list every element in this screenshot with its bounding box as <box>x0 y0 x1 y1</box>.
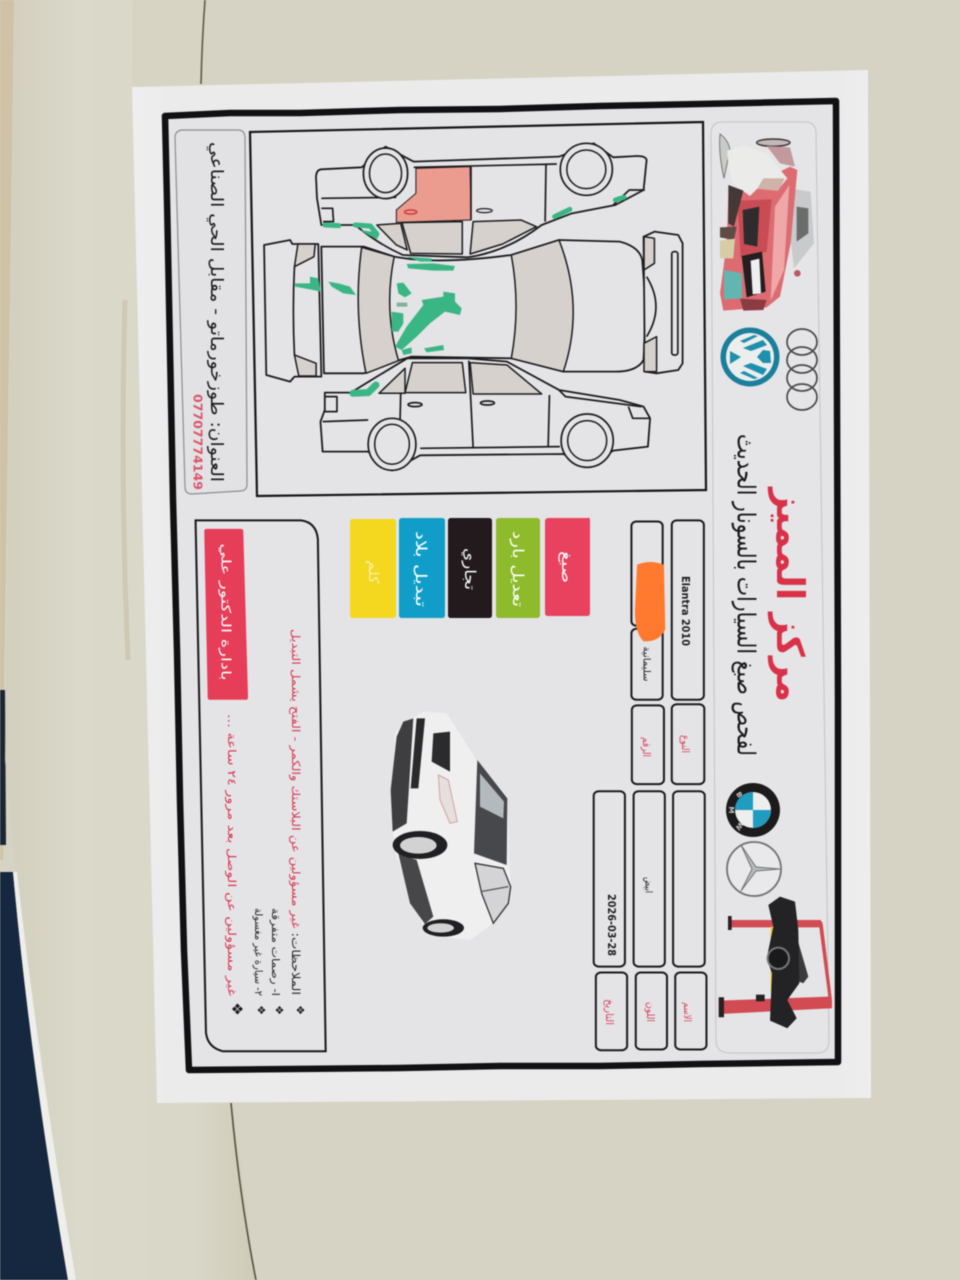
button: commercial <box>448 518 492 618</box>
address text: العنوان: طوزخورماتو - مقابل الحي الصناعي <box>206 142 226 482</box>
button: replaced <box>399 518 445 618</box>
button: replaced: تبديل بلاد <box>412 531 430 607</box>
label: name: الاسم <box>681 1002 693 1022</box>
icon: BMW logo: W <box>733 821 744 832</box>
icon: BMW logo: B <box>734 791 744 799</box>
icon: BMW logo: M <box>727 807 735 814</box>
panel: address bar <box>175 130 247 494</box>
field: type label box <box>672 704 704 784</box>
signature button <box>204 529 248 700</box>
note bullets: ❖ <box>272 1005 286 1015</box>
green paint mark <box>353 385 376 393</box>
label: date: التاريخ <box>603 999 615 1025</box>
legend: damage colour buttons <box>350 518 590 618</box>
field: number label box <box>632 705 664 784</box>
car top view (middle) <box>264 232 683 382</box>
green paint blotches on top view <box>295 230 462 355</box>
field: plate value <box>631 521 663 626</box>
icon: Mercedes star <box>727 842 781 896</box>
label: type: النوع <box>679 735 691 753</box>
value: colour: ابيض <box>642 877 654 893</box>
note bullets <box>228 1002 306 1016</box>
value: city: سليمانية <box>640 646 652 682</box>
field: name label box <box>675 972 706 1049</box>
field: colour value <box>634 791 665 967</box>
note bullets: ❖ <box>228 1002 246 1016</box>
paper sheet <box>132 70 871 1103</box>
field: date label box <box>596 972 627 1050</box>
button: cold repair: تعديل بارد <box>509 531 527 607</box>
note line 1: الملاحظات: غير مسؤولين عن البلاستك والكمر - الفتح يشمل التبديل <box>288 629 303 995</box>
button: paint: صبغ <box>558 551 576 583</box>
note line 2: ا- رصمات متفرقة <box>269 908 281 996</box>
manager name: بادارة الدكتور علي <box>218 544 232 680</box>
subtitle: لفحص صبغ السيارات بالسونار الحديث <box>730 434 760 756</box>
field: colour label box <box>636 972 667 1049</box>
icon: car on red lift <box>719 897 832 1028</box>
note line 4: غير مسؤولين عن الوصل بعد مرور ٢٤ ساعة ... <box>224 714 239 996</box>
button: commercial: تجاري <box>460 548 479 590</box>
button: putty <box>350 519 396 618</box>
panel: car damage diagram <box>250 122 706 496</box>
redaction mark <box>635 562 665 641</box>
panel: notes <box>196 520 326 1051</box>
illustration: white car <box>391 712 511 940</box>
car side view (upper) <box>316 143 647 257</box>
title: مركز المميز <box>768 486 812 702</box>
damaged red door panel <box>396 167 471 222</box>
field: name value <box>673 791 705 967</box>
decorative frame border <box>165 101 838 1070</box>
value: date: 2026-03-28 <box>605 894 617 956</box>
icon: Volkswagen logo <box>720 328 780 386</box>
note line 3: ٢- سيارة غير مغسولة <box>252 908 264 996</box>
phone number: 07707774149 <box>190 394 206 490</box>
header panel <box>711 122 832 1053</box>
icon: BMW logo <box>726 783 780 837</box>
icon: Audi rings <box>787 329 817 410</box>
label: colour: اللون <box>644 1002 656 1022</box>
note bullets: ❖ <box>294 1005 306 1015</box>
button: cold repair <box>496 518 540 618</box>
green paint marks <box>325 197 624 234</box>
form fields <box>594 520 706 1050</box>
note bullets: ❖ <box>254 1005 268 1015</box>
value: model: Elantra 2010 <box>679 576 691 646</box>
button: putty: كلم <box>365 560 381 584</box>
button: paint <box>545 518 590 616</box>
car side view (lower) <box>320 358 650 471</box>
icon: red car with airbag illustration <box>720 134 814 311</box>
field: date value <box>594 791 625 967</box>
field: city value <box>631 629 663 700</box>
field: type value <box>672 520 704 700</box>
label: number: الرقم <box>640 737 652 757</box>
